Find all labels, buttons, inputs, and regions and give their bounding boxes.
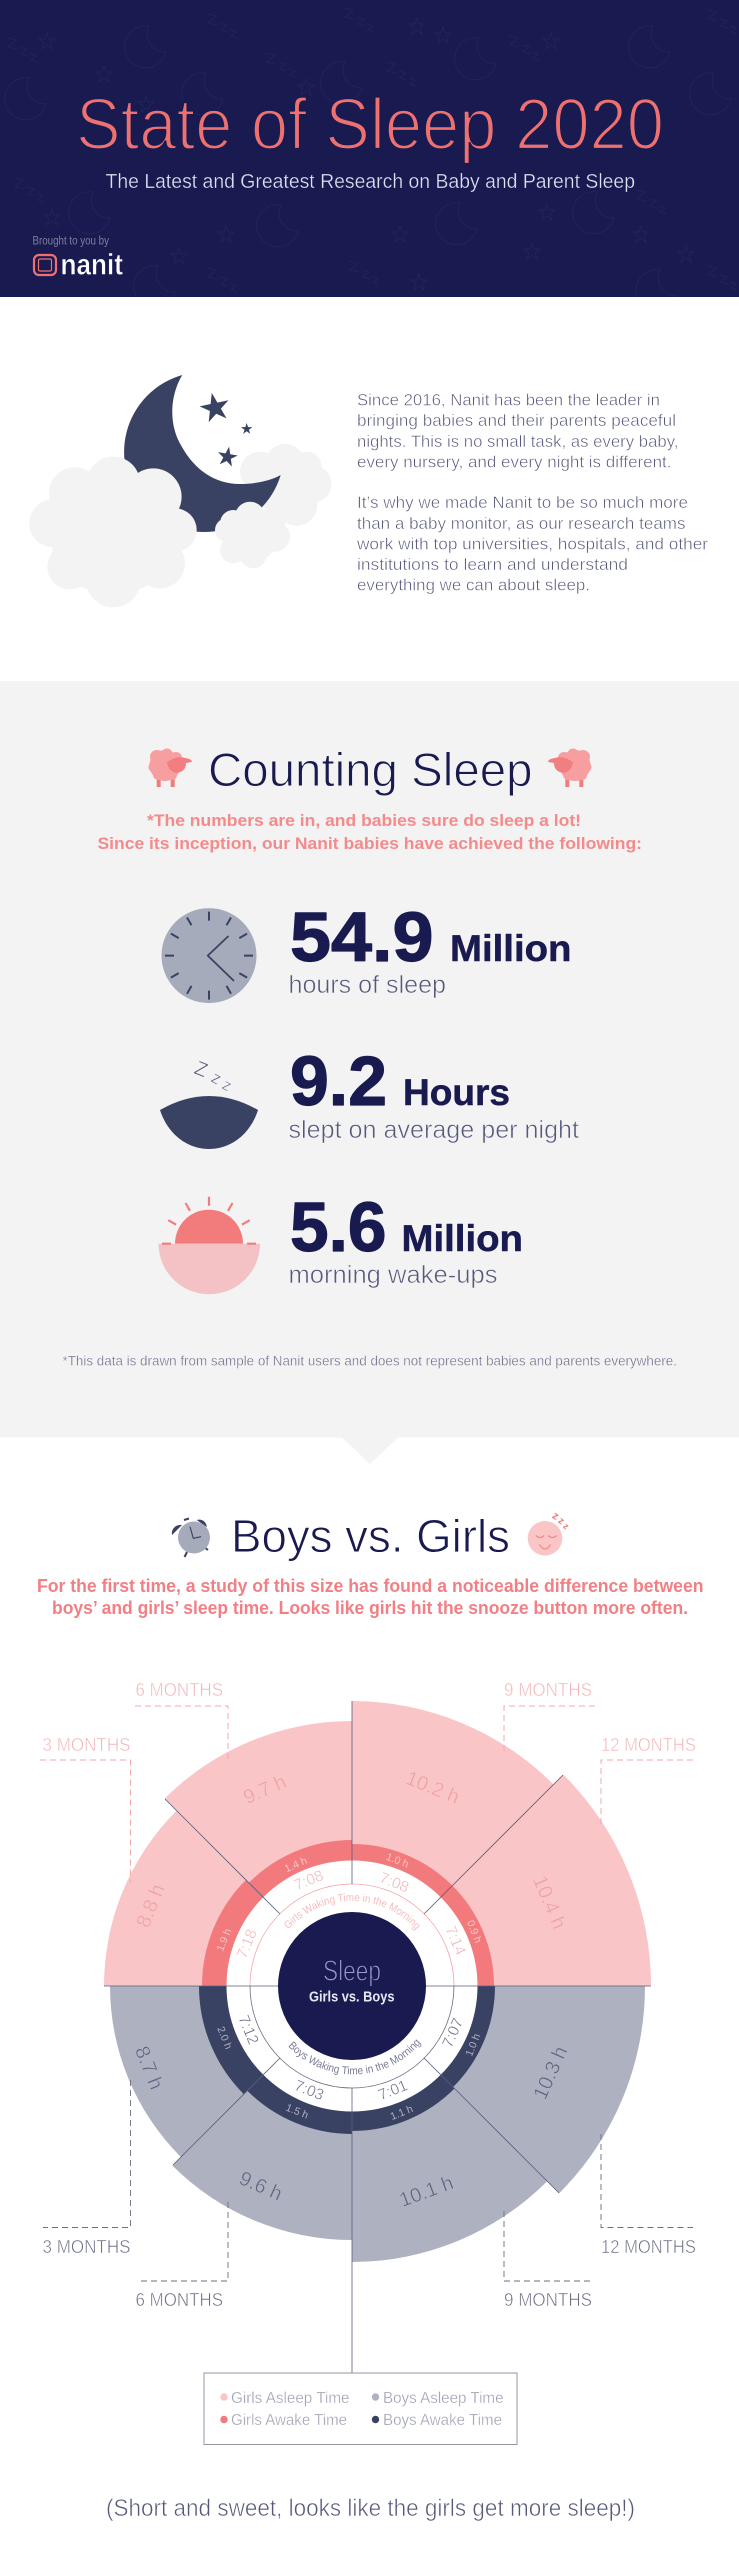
logo: nanit bbox=[34, 248, 123, 282]
waking time ring bbox=[226, 1860, 478, 2112]
boys month callouts: 9 MONTHS bbox=[504, 2290, 592, 2310]
boys awake values bbox=[214, 2025, 483, 2123]
text: intro paragraph 2: everything we can about sleep. bbox=[357, 576, 590, 594]
legend: Boys Asleep Time bbox=[383, 2390, 504, 2407]
icon: sunrise bbox=[158, 1197, 260, 1294]
girls waking times: 7:18 bbox=[234, 1927, 261, 1961]
boys asleep values: 9.6 h bbox=[236, 2167, 285, 2206]
curved label: boys waking time: Boys Waking Time in the Morning bbox=[288, 2040, 422, 2075]
text: intro paragraph 2: than a baby monitor, as our research teams bbox=[357, 515, 686, 533]
boys month callouts: 12 MONTHS bbox=[601, 2237, 696, 2257]
girls month callouts: 3 MONTHS bbox=[42, 1735, 130, 1755]
intro text: boys vs girls: boys’ and girls’ sleep time. Looks like girls hit the snooze button more often. bbox=[52, 1597, 688, 1618]
girls asleep values: 10.4 h bbox=[528, 1873, 570, 1932]
stat: 54.9 million hours of sleep: 54.9 bbox=[290, 898, 434, 976]
icon: moon, stars and clouds bbox=[29, 375, 332, 607]
icon: sheep right bbox=[548, 748, 592, 787]
text: intro paragraph 2: It’s why we made Nanit to be so much more bbox=[357, 494, 688, 512]
boys month callouts: 6 MONTHS bbox=[136, 2290, 223, 2310]
girls awake values bbox=[214, 1851, 484, 1953]
panel: header bbox=[0, 0, 739, 312]
legend bbox=[204, 2373, 517, 2444]
intro text: counting sleep: Since its inception, our Nanit babies have achieved the following: bbox=[98, 834, 642, 853]
boys month callouts: 3 MONTHS bbox=[42, 2237, 130, 2257]
icon: sheep left bbox=[148, 748, 192, 787]
text: intro paragraph 2: institutions to learn and understand bbox=[357, 556, 628, 574]
stat: 54.9 million hours of sleep bbox=[288, 898, 572, 999]
stat: 9.2 hours per night bbox=[288, 1042, 579, 1144]
chart: sleep radial chart bbox=[40, 1680, 696, 2372]
boys waking times: 7:12 bbox=[234, 2013, 262, 2047]
boys awake values: 1.5 h bbox=[284, 2102, 310, 2122]
boys waking times: 7:03 bbox=[292, 2077, 326, 2104]
girls asleep values: 8.8 h bbox=[132, 1881, 170, 1931]
girls awake values: 1.4 h bbox=[283, 1855, 309, 1875]
boys awake values: 2.0 h bbox=[214, 2025, 234, 2051]
closing note: (Short and sweet, looks like the girls get more sleep!) bbox=[106, 2495, 635, 2522]
girls awake ring bbox=[202, 1840, 494, 1986]
stat: 9.2 hours per night: slept on average per night bbox=[288, 1116, 579, 1144]
intro text: boys vs girls: For the first time, a study of this size has found a noticeable difference between bbox=[37, 1575, 704, 1596]
stat: 5.6 million wake-ups: 5.6 bbox=[290, 1188, 386, 1266]
girls asleep values bbox=[132, 1767, 570, 1932]
boys waking times: 7:07 bbox=[439, 2016, 467, 2050]
girls asleep values: 9.7 h bbox=[240, 1771, 290, 1809]
icon: sleeping pillow with zzz bbox=[160, 1057, 258, 1149]
title: State of Sleep 2020 bbox=[76, 85, 664, 165]
stat: 9.2 hours per night: Hours bbox=[403, 1072, 510, 1113]
girls awake values: 0.9 h bbox=[464, 1919, 484, 1945]
boys awake values: 1.0 h bbox=[463, 2032, 483, 2058]
icon: sleeping face bbox=[528, 1510, 571, 1556]
icon: alarm clock bbox=[172, 1518, 210, 1557]
girls asleep sectors bbox=[104, 1701, 651, 1986]
brought to you by: Brought to you by bbox=[32, 236, 109, 248]
center circle: Girls vs. Boys bbox=[309, 1990, 394, 2006]
girls waking times bbox=[234, 1867, 469, 1961]
girls waking times: 7:08 bbox=[377, 1869, 411, 1897]
boys waking times: 7:01 bbox=[376, 2077, 410, 2104]
icon: sleeping pillow with zzz: z bbox=[208, 1068, 225, 1089]
heading: counting sleep: Counting Sleep bbox=[208, 744, 532, 797]
boys waking times bbox=[234, 2013, 467, 2104]
icon: sleeping face: z bbox=[550, 1510, 561, 1523]
subtitle: The Latest and Greatest Research on Baby and Parent Sleep bbox=[106, 171, 635, 193]
boys asleep values: 10.3 h bbox=[530, 2043, 572, 2103]
heading: boys vs girls: Boys vs. Girls bbox=[231, 1510, 510, 1562]
boys awake ring bbox=[199, 1986, 495, 2134]
center circle bbox=[278, 1912, 426, 2060]
intro text: boys vs girls bbox=[37, 1575, 704, 1618]
stat: 5.6 million wake-ups bbox=[288, 1188, 523, 1289]
stat: 9.2 hours per night: 9.2 bbox=[290, 1042, 387, 1120]
boys awake values: 1.1 h bbox=[389, 2103, 415, 2123]
boys asleep values: 8.7 h bbox=[130, 2043, 167, 2093]
stat: 54.9 million hours of sleep: Million bbox=[450, 928, 572, 969]
legend: Girls Asleep Time bbox=[231, 2390, 350, 2407]
logo: nanit: nanit bbox=[60, 248, 123, 282]
curved label: girls waking time: Girls Waking Time in the Morning bbox=[284, 1893, 420, 1930]
text: intro paragraph 1 bbox=[357, 392, 678, 472]
text: intro paragraph 1: every nursery, and every night is different. bbox=[357, 454, 672, 472]
icon: sleeping face: z bbox=[556, 1515, 566, 1527]
boys month callouts bbox=[42, 2080, 696, 2310]
girls waking times: 7:08 bbox=[292, 1867, 326, 1894]
girls waking times: 7:14 bbox=[441, 1923, 469, 1958]
girls month callouts: 12 MONTHS bbox=[601, 1735, 696, 1755]
legend: Girls Awake Time bbox=[231, 2412, 347, 2429]
icon: sleeping pillow with zzz: Z bbox=[191, 1057, 211, 1082]
panel: boys vs girls heading bbox=[37, 1510, 704, 1618]
center circle: Sleep bbox=[323, 1956, 381, 1988]
girls month callouts bbox=[40, 1680, 696, 1883]
intro text: counting sleep bbox=[98, 811, 642, 853]
girls asleep values: 10.2 h bbox=[403, 1767, 462, 1809]
stat: 5.6 million wake-ups: morning wake-ups bbox=[288, 1261, 498, 1289]
panel: counting sleep bbox=[0, 681, 739, 1464]
text: intro paragraph 1: nights. This is no small task, as every baby, bbox=[357, 433, 678, 451]
panel: intro bbox=[29, 375, 709, 607]
divider lines bbox=[104, 1701, 651, 2373]
icon: sleeping face: z bbox=[561, 1521, 571, 1532]
boys asleep sectors bbox=[110, 1986, 645, 2262]
boys asleep values: 10.1 h bbox=[397, 2172, 456, 2212]
text: intro paragraph 2 bbox=[356, 494, 709, 594]
girls month callouts: 6 MONTHS bbox=[136, 1680, 223, 1700]
intro text: counting sleep: *The numbers are in, and babies sure do sleep a lot! bbox=[147, 811, 581, 830]
icon: clock bbox=[162, 908, 256, 1003]
footnote: *This data is drawn from sample of Nanit users and does not represent babies and parents everywhere. bbox=[62, 1354, 677, 1368]
text: intro paragraph 1: Since 2016, Nanit has been the leader in bbox=[357, 392, 660, 410]
stat: 54.9 million hours of sleep: hours of sleep bbox=[288, 971, 446, 999]
text: intro paragraph 2: work with top universities, hospitals, and other bbox=[356, 536, 709, 554]
girls month callouts: 9 MONTHS bbox=[504, 1680, 592, 1700]
icon: sleeping pillow with zzz: z bbox=[219, 1077, 234, 1095]
boys asleep values bbox=[130, 2043, 572, 2212]
legend: Boys Awake Time bbox=[383, 2412, 502, 2429]
stat: 5.6 million wake-ups: Million bbox=[402, 1218, 523, 1259]
text: intro paragraph 1: bringing babies and their parents peaceful bbox=[357, 412, 676, 430]
girls awake values: 1.0 h bbox=[384, 1851, 410, 1871]
girls awake values: 1.9 h bbox=[214, 1927, 234, 1953]
